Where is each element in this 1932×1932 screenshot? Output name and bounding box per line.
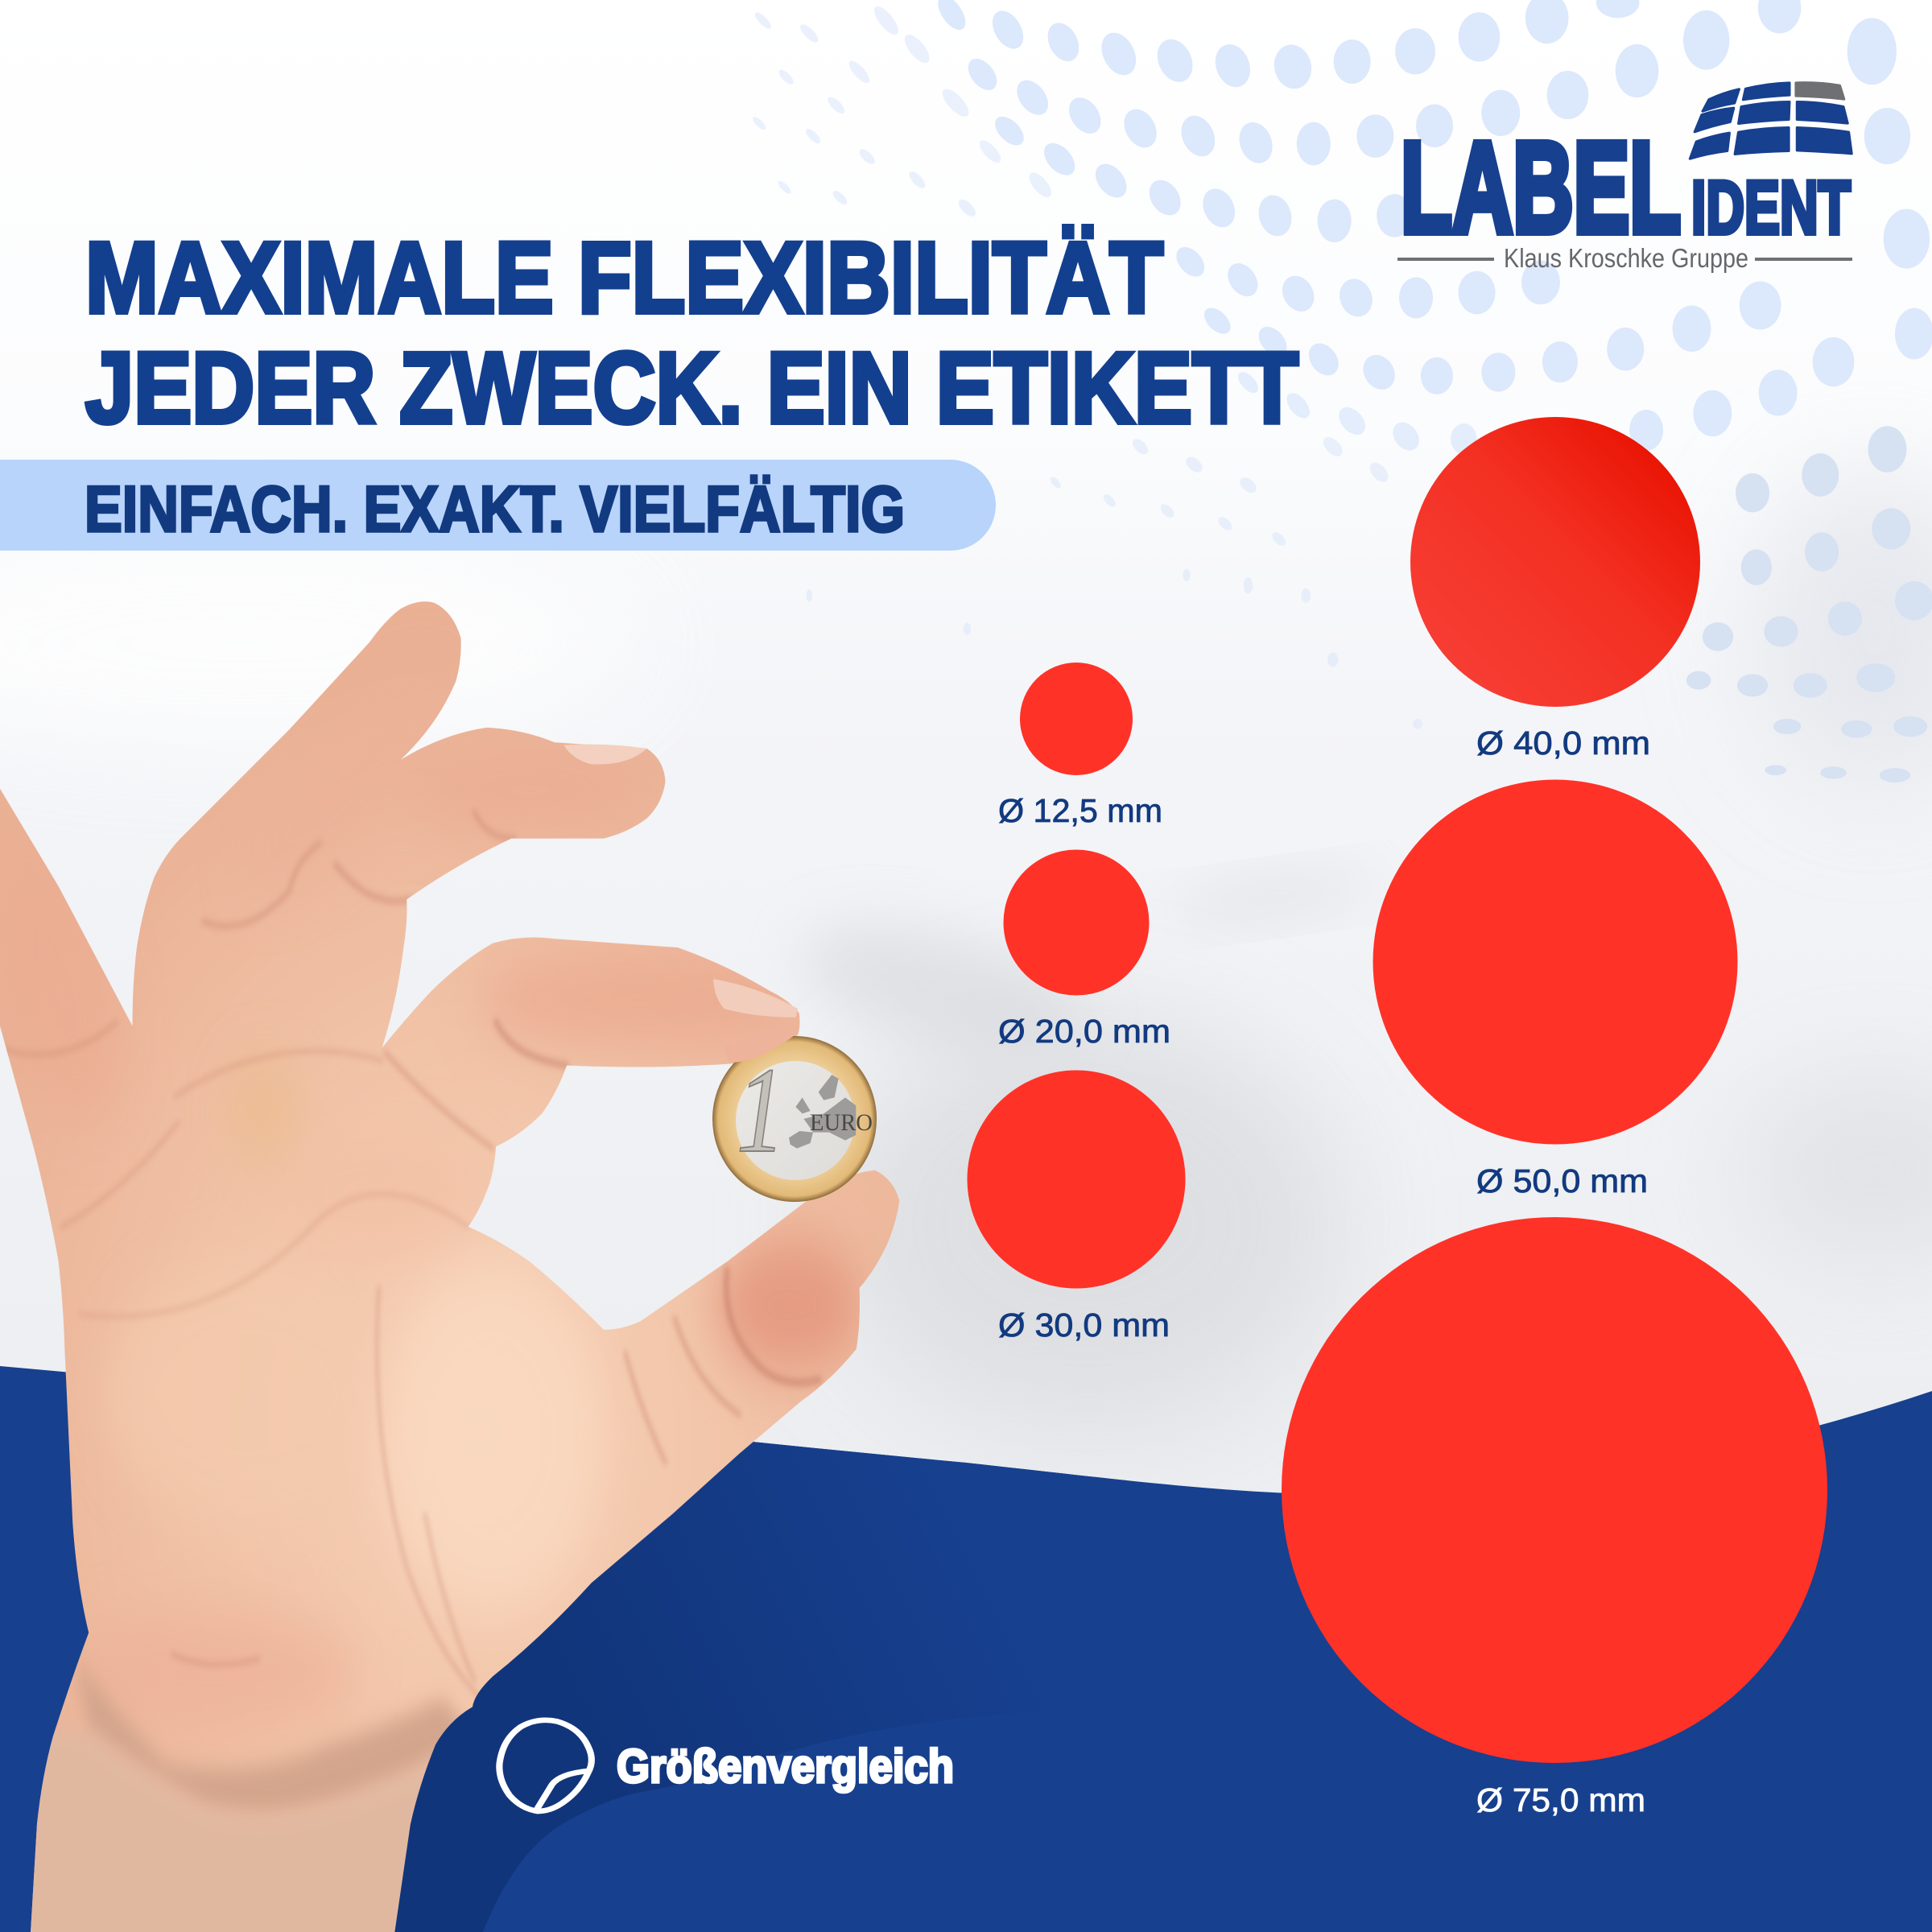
logo: Labelident: IDENT — [1691, 165, 1851, 250]
icon: peeling sticker — [499, 1720, 592, 1811]
blue wave — [0, 1352, 1932, 1932]
size 40,0 mm: Ø 40,0 mm — [1476, 724, 1650, 762]
label: Größenvergleich: Größenvergleich — [617, 1740, 954, 1793]
hand photo illustration — [0, 564, 924, 1932]
wrist skin band — [76, 1666, 462, 1814]
size 12,5 mm: Ø 12,5 mm — [998, 792, 1162, 829]
logo: Labelident: Klaus Kroschke Gruppe — [1504, 243, 1748, 273]
size 20,0 mm: Ø 20,0 mm — [998, 1013, 1170, 1050]
size 40,0 mm — [1410, 417, 1700, 762]
euro coin — [712, 1036, 877, 1202]
size 20,0 mm — [998, 850, 1170, 1050]
logo: Labelident: LABEL — [1401, 115, 1681, 259]
subtitle pill: EINFACH. EXAKT. VIELFÄLTIG — [85, 473, 905, 546]
size 50,0 mm: Ø 50,0 mm — [1476, 1162, 1648, 1199]
euro coin: EURO — [810, 1109, 873, 1136]
euro coin: 1 — [737, 1042, 785, 1178]
size 30,0 mm: Ø 30,0 mm — [998, 1307, 1170, 1344]
size 30,0 mm — [968, 1071, 1185, 1344]
title — [85, 222, 1298, 444]
size 50,0 mm — [1373, 779, 1737, 1199]
lower wrist — [0, 1724, 444, 1932]
title: MAXIMALE FLEXIBILITÄT — [85, 222, 1163, 334]
halftone dot pattern — [750, 0, 1932, 782]
size 75,0 mm — [1282, 1217, 1827, 1818]
skin creases — [0, 812, 819, 1698]
title: JEDER ZWECK. EIN ETIKETT — [85, 332, 1298, 444]
size 12,5 mm — [998, 663, 1162, 829]
size 75,0 mm: Ø 75,0 mm — [1476, 1781, 1645, 1818]
fingertip over coin — [724, 1022, 799, 1063]
fingernails — [564, 745, 798, 1018]
